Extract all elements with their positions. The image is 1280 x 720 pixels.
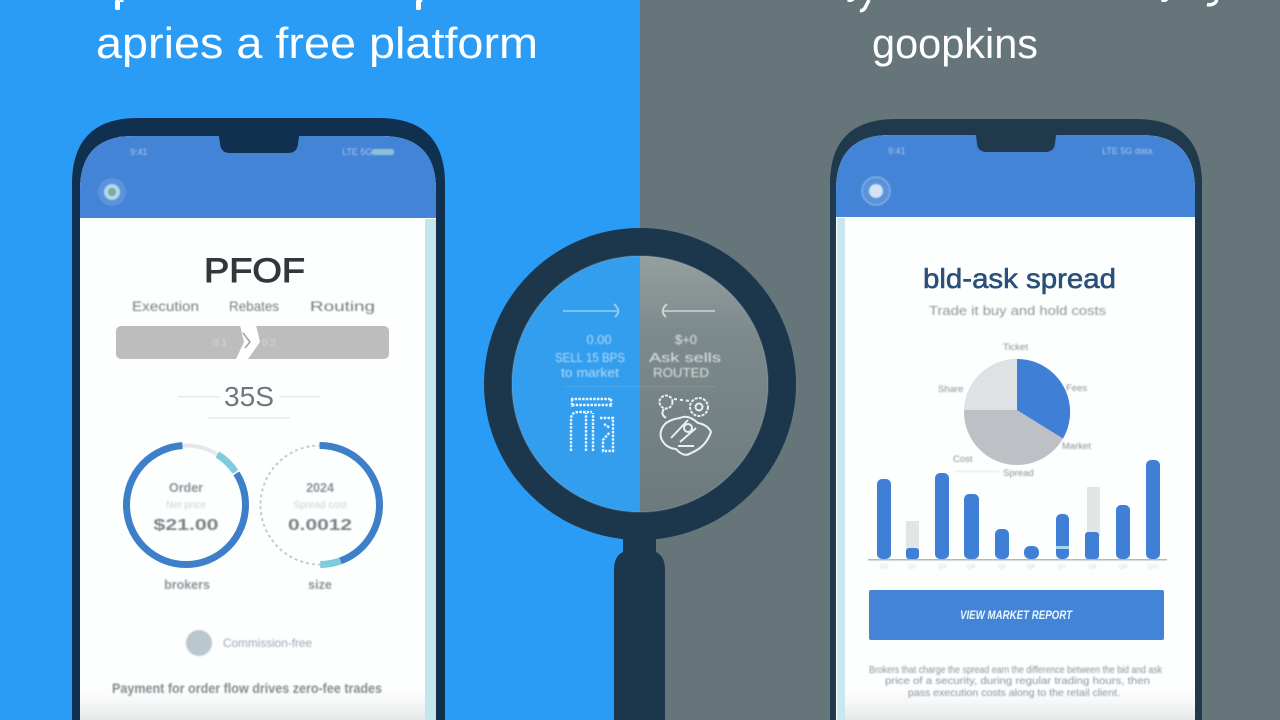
lens right half — [640, 256, 768, 512]
chart: pie: Spread — [1003, 468, 1034, 479]
lens text: right: $+0 — [675, 332, 697, 347]
arrow: right — [563, 304, 619, 317]
chart: bars: Q10 — [1147, 564, 1159, 570]
status bar: 9:41 — [888, 146, 906, 156]
magnifying glass — [498, 242, 782, 720]
footer paragraph: pass execution costs along to the retail client. — [908, 687, 1120, 699]
chart: left ring: Net price — [166, 500, 206, 511]
chart: bars: Q6 — [1027, 564, 1036, 570]
lens text: right — [649, 332, 722, 380]
lens rim highlight — [512, 256, 768, 512]
icon: blueprint — [571, 399, 613, 451]
panel: right grey background — [640, 0, 1280, 720]
footer paragraph: price of a security, during regular trading hours, then — [885, 675, 1150, 687]
lens text: right: ROUTED — [653, 365, 709, 380]
column labels: Rebates — [229, 298, 279, 314]
chart: bars: Q1 — [880, 564, 889, 570]
chart: bars: Q9 — [1119, 564, 1128, 570]
heading: left — [95, 0, 538, 68]
title: PFOF: PFOF — [204, 252, 305, 290]
footer paragraph — [869, 664, 1163, 699]
footer badge: Commission-free — [223, 636, 312, 650]
arrow: left — [662, 304, 715, 317]
status bar — [130, 147, 394, 157]
divider — [565, 386, 715, 387]
chart: right ring: size — [308, 578, 332, 592]
icon: app badge — [862, 177, 890, 205]
notch — [972, 130, 1060, 152]
chart: bars: Q2 — [908, 564, 917, 570]
chart: right ring — [260, 446, 380, 592]
chart: left ring: Order — [169, 481, 203, 495]
chart: bars — [868, 460, 1167, 570]
chart: bars: Q5 — [998, 564, 1007, 570]
phone body — [830, 119, 1202, 720]
icon: gears and hand — [660, 396, 711, 455]
chart: bars: Q8 — [1088, 564, 1097, 570]
chart: pie: Market — [1062, 441, 1091, 452]
column labels: Routing — [310, 298, 375, 314]
chart: pie: Share — [938, 384, 963, 395]
lens text: left — [555, 332, 625, 380]
chart: bars: Q4 — [967, 564, 976, 570]
lens text: right: Ask sells — [649, 350, 722, 365]
status bar: LTE 5G — [342, 147, 372, 157]
button — [869, 590, 1164, 640]
grey progress bar with chevron: 0.1 — [213, 338, 227, 349]
column labels — [132, 298, 375, 314]
chart: left ring: $21.00 — [154, 517, 219, 534]
footer badge — [186, 630, 312, 656]
phone screen — [836, 135, 1195, 720]
chart: pie: Cost — [953, 454, 973, 465]
chart: left ring: brokers — [164, 578, 210, 592]
chart: pie: Fees — [1066, 383, 1087, 394]
chart: bars: Q3 — [938, 564, 947, 570]
status bar: 9:41 — [130, 147, 148, 157]
lens left half — [512, 256, 640, 512]
chart: right ring: 0.0012 — [288, 517, 352, 534]
phone body — [72, 118, 445, 720]
column labels: Execution — [132, 298, 199, 314]
grey progress bar with chevron: 0.2 — [262, 338, 276, 349]
heading: right — [735, 0, 1217, 67]
chart: right ring: Spread cost — [293, 500, 347, 511]
grey progress bar with chevron — [116, 325, 389, 359]
lens text: left: SELL 15 BPS — [555, 350, 625, 365]
panel: left phone — [72, 118, 445, 720]
panel: left blue background — [0, 0, 640, 720]
icon: app badge — [98, 178, 126, 206]
lens text: left: to market — [561, 365, 619, 380]
notch — [214, 130, 304, 153]
lens ring — [498, 242, 782, 526]
footer caption: Payment for order flow drives zero-fee trades — [112, 680, 382, 696]
chart: right ring: 2024 — [306, 481, 334, 495]
footer paragraph: Brokers that charge the spread earn the difference between the bid and ask — [869, 664, 1163, 676]
status bar: LTE 5G data — [1102, 146, 1152, 156]
heading: left: apries a free platform — [96, 19, 538, 68]
panel: right phone — [830, 119, 1202, 720]
value: 35S: 35S — [224, 381, 274, 412]
title: bid-ask spread: bld-ask spread — [923, 263, 1116, 294]
subtitle: Trade it buy and hold costs — [929, 303, 1107, 318]
chart: pie: Ticket — [1003, 342, 1028, 353]
chart: left ring — [126, 446, 246, 592]
handle — [614, 535, 665, 720]
button: VIEW MARKET REPORT — [960, 608, 1073, 622]
chart: bars: Q7 — [1058, 564, 1067, 570]
phone screen — [80, 136, 436, 720]
lens text: left: 0.00 — [586, 332, 612, 347]
heading: right: goopkins — [872, 20, 1038, 67]
chart: pie — [938, 342, 1091, 479]
status bar — [888, 146, 1152, 156]
